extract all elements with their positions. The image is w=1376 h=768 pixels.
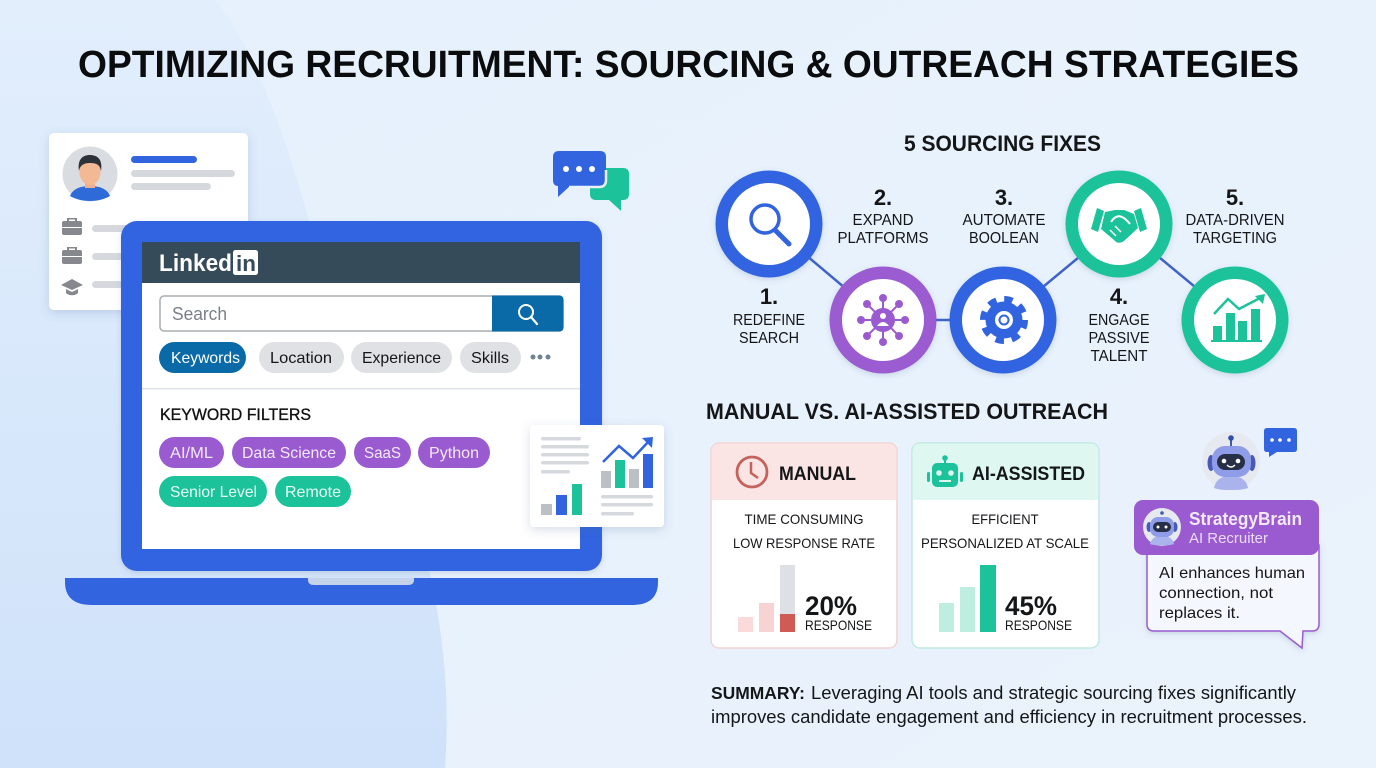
filter tabs <box>159 342 550 373</box>
step 1: redefine search <box>716 170 822 347</box>
bar chart: ai-assisted 45% <box>939 565 996 632</box>
step 4: engage passive talent: TALENT <box>1090 348 1148 365</box>
step 4: engage passive talent: PASSIVE <box>1088 330 1150 347</box>
callout: strategybrain quote: StrategyBrain <box>1189 509 1302 529</box>
profile name lines <box>131 156 235 190</box>
keyword filters heading: KEYWORD FILTERS <box>160 405 311 424</box>
summary: SUMMARY: <box>711 683 805 703</box>
step 1: redefine search: REDEFINE <box>733 312 805 329</box>
panel: manual outreach: TIME CONSUMING <box>744 511 864 527</box>
laptop <box>65 221 658 605</box>
stat: 20% response: RESPONSE <box>805 617 872 633</box>
keyword tags: Data Science <box>242 445 336 462</box>
panel: ai-assisted outreach: AI-ASSISTED <box>972 463 1085 485</box>
summary <box>711 683 1307 727</box>
linkedin search window <box>142 242 580 549</box>
icon: robot <box>927 455 963 487</box>
keyword tags: SaaS <box>364 445 401 462</box>
step 3: automate boolean: 3. <box>995 185 1013 210</box>
keyword tags: Senior Level <box>170 484 257 501</box>
panel: ai-assisted outreach: EFFICIENT <box>972 511 1039 527</box>
laptop screen frame <box>121 221 602 571</box>
step 4: engage passive talent: ENGAGE <box>1088 312 1150 329</box>
stat: 20% response <box>805 591 872 633</box>
callout: strategybrain quote: AI enhances human <box>1159 565 1305 582</box>
step 3: automate boolean: BOOLEAN <box>969 230 1039 247</box>
step 2: expand platforms <box>830 185 936 374</box>
mini bar chart <box>541 484 582 515</box>
panel: manual outreach: LOW RESPONSE RATE <box>733 535 875 551</box>
stat: 45% response: 45% <box>1005 591 1057 621</box>
step 5: data-driven targeting: DATA-DRIVEN <box>1186 212 1284 229</box>
summary: improves candidate engagement and efficiency in recruitment processes. <box>711 707 1307 727</box>
step 1: redefine search: SEARCH <box>739 330 799 347</box>
filter tabs: Keywords <box>171 350 240 367</box>
panel: ai-assisted outreach: PERSONALIZED AT SCALE <box>921 535 1089 551</box>
linkedin header bar: in <box>236 251 256 276</box>
callout: strategybrain quote: connection, not <box>1159 585 1274 602</box>
title: OPTIMIZING RECRUITMENT: SOURCING & OUTREACH STRATEGIES <box>78 44 1299 86</box>
search box: Search <box>172 304 227 324</box>
icon: candidate avatar <box>62 146 118 202</box>
filter tabs: Experience <box>362 350 441 367</box>
strategybrain mini avatar <box>1143 508 1181 546</box>
step 5: data-driven targeting: 5. <box>1226 185 1244 210</box>
keyword tags: AI/ML <box>170 445 213 462</box>
callout: strategybrain quote: AI Recruiter <box>1189 531 1268 547</box>
keyword tags <box>159 437 490 507</box>
step 2: expand platforms: PLATFORMS <box>838 230 928 247</box>
keyword tags: Remote <box>285 484 341 501</box>
icon: education <box>61 279 83 295</box>
step 4: engage passive talent: 4. <box>1110 284 1128 309</box>
icon: clock <box>737 457 767 487</box>
laptop base <box>65 578 658 605</box>
callout: strategybrain quote: replaces it. <box>1159 605 1240 622</box>
step 1: redefine search: 1. <box>760 284 778 309</box>
summary: Leveraging AI tools and strategic sourcing fixes significantly <box>811 683 1296 703</box>
icon: work experience 2 <box>62 247 82 264</box>
sourcing fixes process flow <box>716 170 1288 374</box>
heading: 5 sourcing fixes: 5 SOURCING FIXES <box>904 131 1101 156</box>
icon: work experience 1 <box>62 218 82 235</box>
filter tabs: Location <box>270 350 332 367</box>
step 2: expand platforms: EXPAND <box>852 212 914 229</box>
callout: strategybrain quote <box>1134 500 1319 648</box>
mini trend chart <box>601 437 653 488</box>
step 5: data-driven targeting <box>1182 185 1288 374</box>
step 5: data-driven targeting: TARGETING <box>1193 230 1277 247</box>
panel: ai-assisted outreach <box>912 443 1099 648</box>
panel: manual outreach: MANUAL <box>779 463 856 485</box>
robot avatar <box>1202 432 1260 490</box>
linkedin header bar <box>142 242 580 283</box>
stat: 20% response: 20% <box>805 591 857 621</box>
panel: manual outreach <box>711 443 897 648</box>
heading: manual vs ai-assisted outreach: MANUAL VS. AI-ASSISTED OUTREACH <box>706 399 1108 424</box>
stat: 45% response <box>1005 591 1072 633</box>
stat: 45% response: RESPONSE <box>1005 617 1072 633</box>
panel: candidate profile card <box>49 133 248 310</box>
panel: floating report card <box>530 425 664 527</box>
step 2: expand platforms: 2. <box>874 185 892 210</box>
step 3: automate boolean <box>950 185 1056 374</box>
search box <box>160 296 564 332</box>
step 3: automate boolean: AUTOMATE <box>962 212 1046 229</box>
step 4: engage passive talent <box>1066 170 1172 365</box>
icon: robot speech bubble <box>1264 428 1297 457</box>
keyword tags: Python <box>429 445 479 462</box>
icon: chat bubbles <box>553 151 629 211</box>
filter tabs: Skills <box>471 350 509 367</box>
bar chart: manual 20% <box>738 565 795 632</box>
linkedin header bar: Linked <box>159 250 232 277</box>
